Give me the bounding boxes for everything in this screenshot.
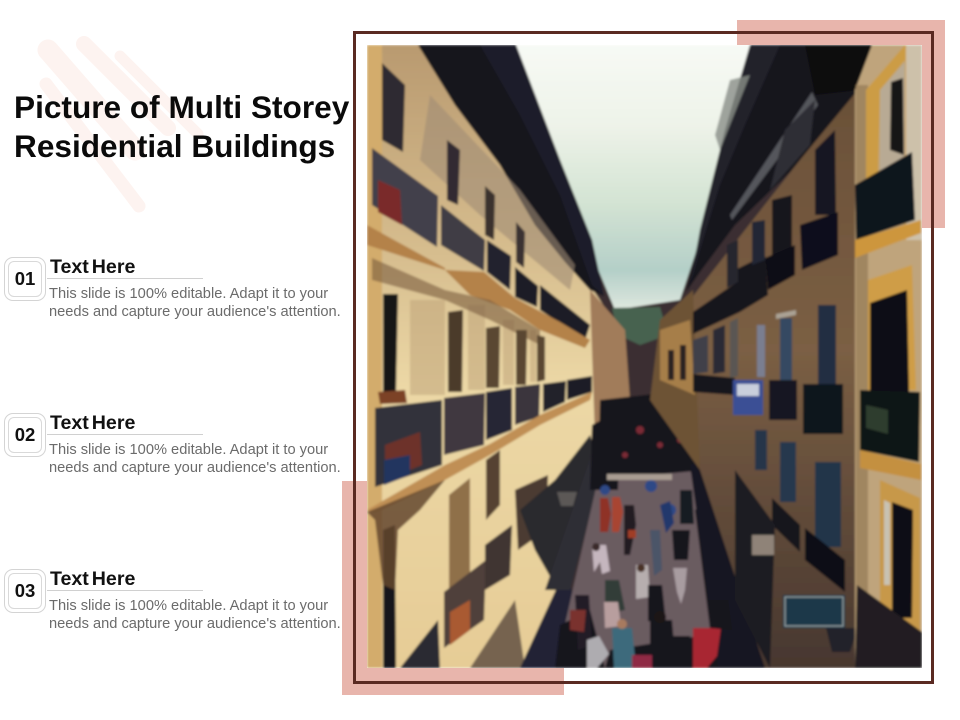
lower dark doors and shadows: [383, 294, 398, 392]
framed photograph of street with residential buildings: [342, 20, 945, 695]
number badge 01: 01: [15, 268, 35, 289]
heading 03: Text Here: [50, 568, 135, 590]
description 01: needs and capture your audience's attention.: [49, 304, 341, 320]
ledge 1 right: [855, 220, 921, 258]
balcony 1 right: [855, 152, 915, 240]
description 02: [49, 442, 341, 476]
street: [564, 470, 712, 668]
lamp right: [826, 628, 858, 652]
yellow window frame: [868, 265, 916, 390]
pub sign: [783, 595, 845, 628]
lamp post: [557, 492, 577, 506]
railing bottom right: [855, 585, 922, 668]
number badge 01: [4, 257, 46, 301]
upper-floor shaded wall: [420, 95, 575, 290]
lower ledges: [367, 392, 592, 513]
item 01: [4, 256, 341, 320]
lower balconies: [375, 400, 442, 487]
distant hill: [612, 307, 668, 345]
people: [570, 490, 732, 668]
ledge 2 right: [860, 450, 921, 480]
description 02: This slide is 100% editable. Adapt it to your: [49, 442, 328, 458]
heading 02: Text Here: [50, 412, 135, 434]
sky: [514, 45, 752, 310]
upper balconies: [372, 148, 438, 247]
pink corner top right: [737, 20, 945, 228]
right lower windows: [757, 325, 765, 377]
left roof / eaves: [418, 45, 604, 296]
description 02: needs and capture your audience's attention.: [49, 460, 341, 476]
title: Residential Buildings: [14, 128, 335, 164]
right upper windows and balconies: [815, 130, 836, 215]
plants along left wall: [520, 435, 600, 580]
description 03: This slide is 100% editable. Adapt it to your: [49, 598, 328, 614]
number badge 02: [4, 413, 46, 457]
description 03: needs and capture your audience's attention.: [49, 616, 341, 632]
description 01: This slide is 100% editable. Adapt it to your: [49, 286, 328, 302]
right roof and eaves: [686, 45, 872, 292]
right brown facade: [690, 90, 855, 668]
upper ledges: [367, 225, 590, 348]
frame: [354, 32, 932, 682]
left facade: [380, 45, 604, 668]
balcony 2 right: [860, 390, 920, 462]
decorative diagonal stripes behind title: [38, 36, 204, 212]
heading 01: Text Here: [50, 256, 135, 278]
rightmost cream building: [855, 45, 922, 668]
description 01: [49, 286, 341, 320]
blue sign: [733, 380, 763, 415]
title: Picture of Multi Storey: [14, 89, 349, 125]
number badge 02: 02: [15, 424, 35, 445]
item 03: [4, 568, 341, 632]
item 02: [4, 412, 341, 476]
crowd: [554, 394, 720, 668]
wall shadow bands: [410, 300, 536, 395]
title: [14, 89, 350, 164]
description 03: [49, 598, 341, 632]
white shop sign: [752, 535, 774, 555]
number badge 03: [4, 569, 46, 613]
pink corner bottom left: [342, 481, 564, 695]
number badge 03: 03: [15, 580, 35, 601]
plant pots: [378, 390, 407, 404]
left windows upper: [382, 63, 405, 152]
dark sidewalk shadow: [520, 588, 572, 668]
photo: [367, 45, 922, 668]
ground floor: [383, 525, 396, 668]
